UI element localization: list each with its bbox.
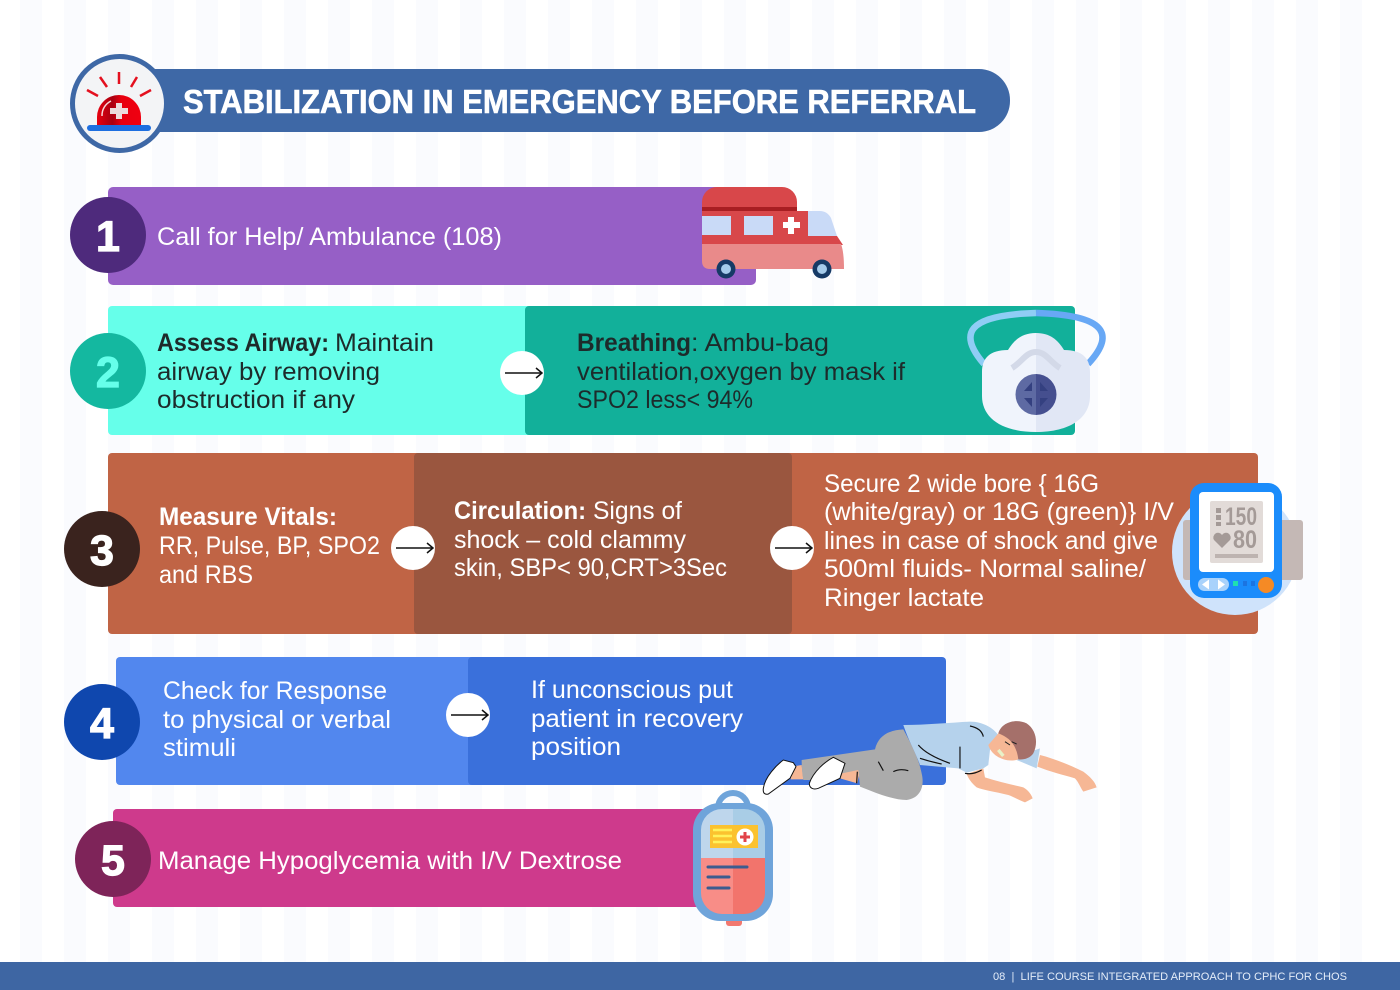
text: check for response: stimuli [163,734,236,762]
text: airway: obstruction if any [157,386,356,414]
text: recovery position [531,676,744,761]
step 1 badge [70,197,146,273]
text: measure vitals: Measure Vitals: [159,503,337,531]
text: airway: Maintain [335,329,434,357]
arrow: vitals to circulation [391,526,435,570]
panel: recovery position [468,657,946,785]
text: circulation: Circulation: [454,497,586,525]
text: check for response [163,677,391,762]
text: recovery position: position [531,733,621,761]
text: hypoglycemia: Manage Hypoglycemia with I/V Dextrose [158,847,622,875]
text: circulation: shock – cold clammy [454,526,686,554]
title banner [118,69,1010,132]
panel: vitals and IV lines [108,453,1258,634]
step 5 badge: 5 [101,837,125,885]
panel: breathing [525,306,1075,435]
step 4 badge [64,684,140,760]
text: measure vitals: and RBS [159,561,253,589]
step 2: airway and breathing [70,306,1103,435]
text: airway [157,329,434,414]
text: call for help: Call for Help/ Ambulance (108) [157,223,502,251]
text: measure vitals: RR, Pulse, BP, SPO2 [159,532,380,560]
text: IV lines and fluids: (white/gray) or 18G (green)} I/V [824,498,1174,526]
arrow: circulation to IV lines [770,526,814,570]
step 5: manage hypoglycemia [75,793,773,926]
text: circulation: Signs of [593,497,682,525]
step 3 badge: 3 [90,527,114,575]
step 1 badge: 1 [96,213,120,261]
icon: oxygen mask [970,313,1103,432]
panel: airway [108,306,538,435]
text: recovery position: If unconscious put [531,676,733,704]
step 3 badge [64,511,140,587]
footer [0,962,1400,990]
icon: blood pressure monitor [1172,483,1303,615]
text: IV lines and fluids: Ringer lactate [824,584,984,612]
panel: step 1 bar [108,187,756,285]
text: breathing: SPO2 less< 94% [577,386,753,414]
text: breathing [577,329,905,414]
icon: blood pressure monitor: 150 [1225,503,1257,531]
text: breathing: ventilation,oxygen by mask if [577,358,905,386]
icon: ambulance [702,187,844,278]
step 5 badge [75,821,151,897]
text: recovery position: patient in recovery [531,705,744,733]
step 1: call for help [70,187,844,285]
panel: step 5 bar [113,809,713,907]
arrow: airway to breathing [500,351,544,395]
icon: emergency siren [72,56,166,150]
text: check for response: Check for Response [163,677,387,705]
text: circulation [454,497,727,582]
footer text: 08 | LIFE COURSE INTEGRATED APPROACH TO CPHC FOR CHOS [993,971,1347,983]
step 2 badge: 2 [96,349,120,397]
arrow: response to recovery position [446,693,490,737]
step 4 badge: 4 [90,700,114,748]
step 4: check response [64,657,1097,802]
text: circulation: skin, SBP< 90,CRT>3Sec [454,554,727,582]
text: airway: airway by removing [157,358,380,386]
icon: blood pressure monitor: 80 [1233,526,1257,554]
text: IV lines and fluids: 500ml fluids- Normal saline/ [824,555,1146,583]
text: IV lines and fluids: lines in case of shock and give [824,527,1158,555]
icon: patient in recovery position [763,721,1097,802]
text: breathing: : Ambu-bag [691,329,829,357]
step 3: vitals and circulation [64,453,1303,634]
text: IV lines and fluids [824,470,1174,612]
text: airway: Assess Airway: [157,329,329,357]
panel: check for response [116,657,486,785]
text: breathing: Breathing [577,329,691,357]
icon: IV dextrose bag [693,793,773,926]
title: STABILIZATION IN EMERGENCY BEFORE REFERRAL [183,83,976,120]
text: IV lines and fluids: Secure 2 wide bore { 16G [824,470,1099,498]
panel: circulation [414,453,792,634]
step 2 badge [70,333,146,409]
text: check for response: to physical or verbal [163,706,391,734]
text: measure vitals [159,503,380,589]
